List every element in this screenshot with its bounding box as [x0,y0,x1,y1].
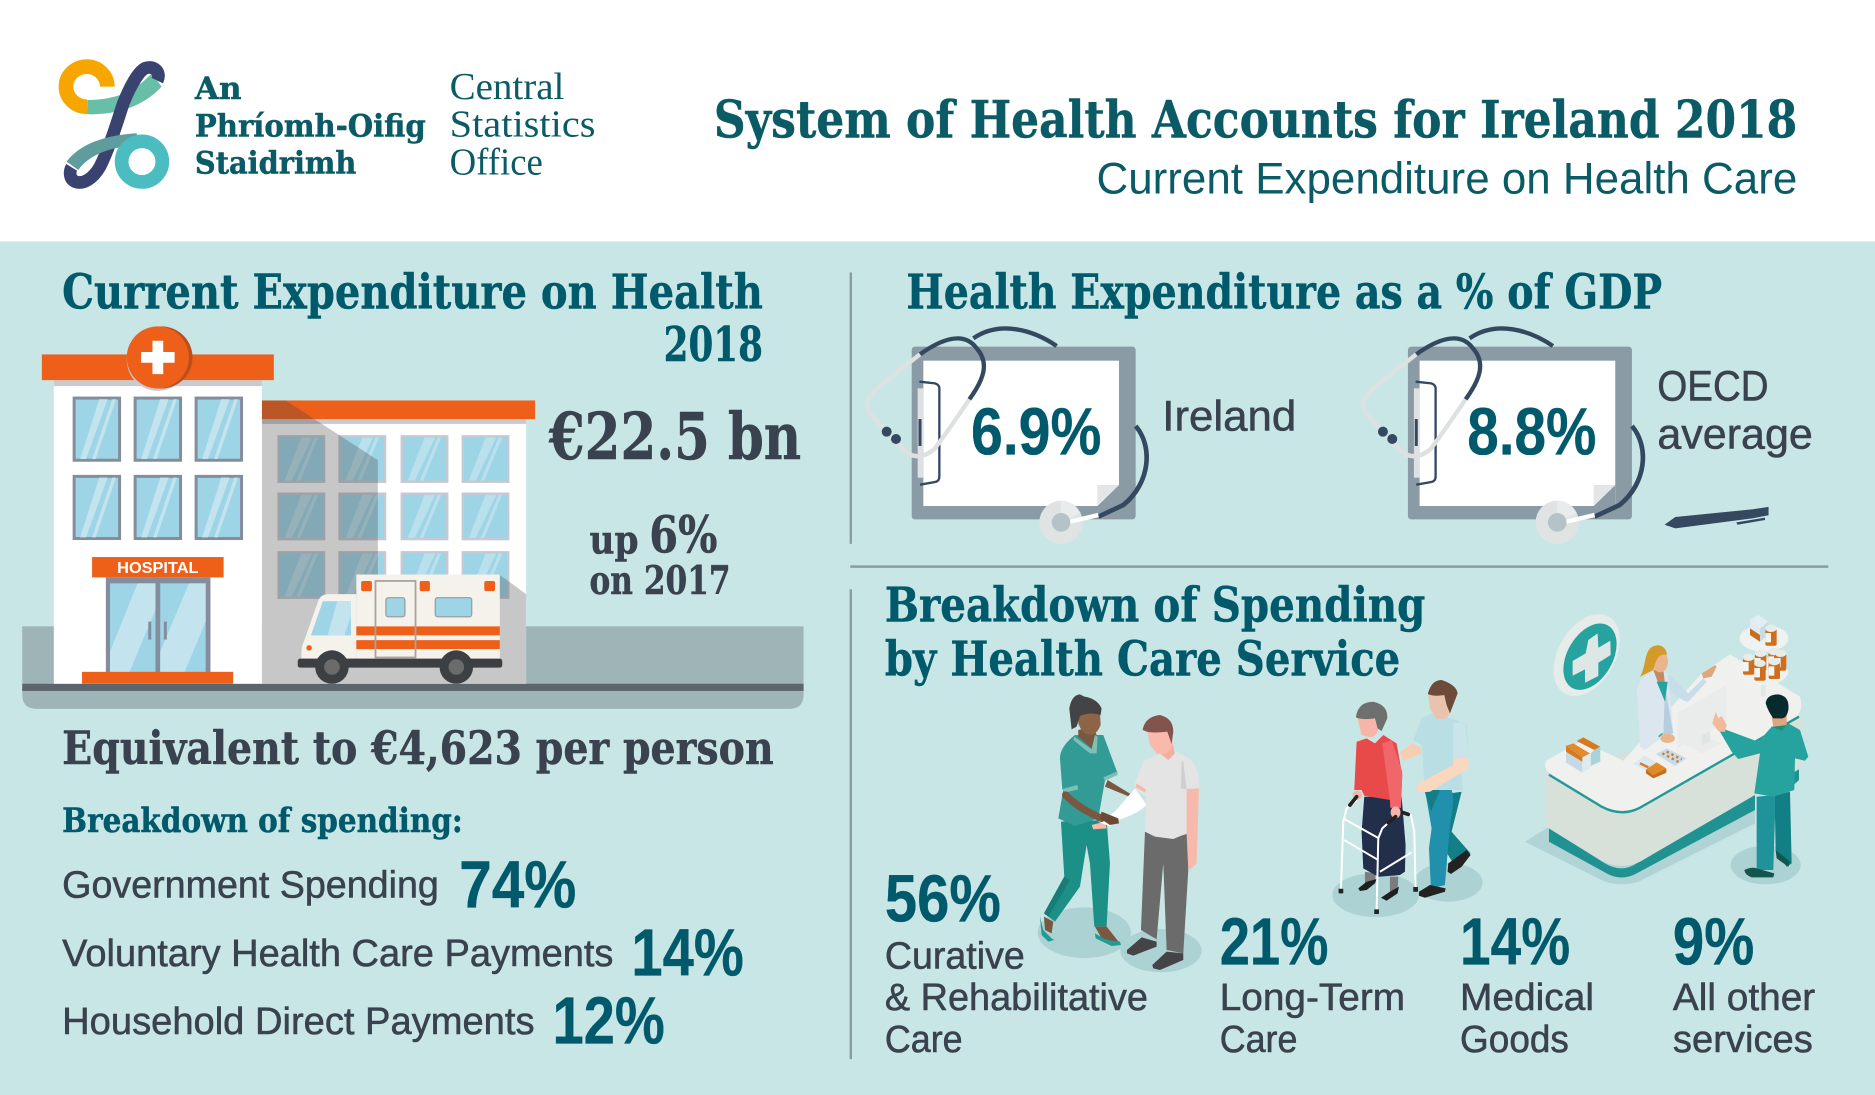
stat: other 9%: services [1673,1018,1813,1061]
stat: up 6% on 2017: 6% [649,505,717,564]
stat: medical goods 14%: Medical [1460,976,1594,1019]
logo Irish name [194,71,426,181]
clipboard: Ireland [867,328,1147,544]
stat: other 9%: 9% [1673,905,1754,980]
row: voluntary: 14% [631,915,744,990]
logo English name: Central [450,66,564,108]
stat: up 6% on 2017: on 2017 [590,558,731,604]
stat: medical goods 14%: Goods [1460,1018,1569,1061]
logo Irish name: Phríomh-Oifig [195,108,426,144]
label: Ireland: Ireland [1162,392,1296,440]
stat: 22.5 bn: €22.5 bn [548,399,801,475]
heading: current expenditure [62,264,763,373]
illustration: hospital and ambulance [22,326,804,709]
row: voluntary: Voluntary Health Care Payments [62,932,613,975]
logo English name: Statistics [450,103,596,145]
stat: curative 56%: Curative [885,934,1025,977]
stat: medical goods 14%: 14% [1460,905,1570,980]
row: household: 12% [552,984,665,1059]
heading: GDP: Health Expenditure as a % of GDP [906,264,1662,320]
heading: current expenditure: 2018 [664,317,763,373]
logo Irish name: Staidrimh [195,145,356,181]
label: OECD average: average [1657,410,1813,458]
logo icon [66,67,162,182]
stat: curative 56%: 56% [885,862,1001,937]
per person: Equivalent to €4,623 per person [62,721,774,775]
illustration: hospital and ambulance: HOSPITAL [117,559,199,577]
stat: medical goods 14% [1460,905,1594,1061]
row: voluntary [62,915,744,990]
stat: curative 56% [885,862,1148,1061]
stat: long-term 21%: Long-Term [1220,976,1405,1019]
logo English name [450,66,596,184]
row: government: Government Spending [62,864,439,907]
stat: other 9% [1673,905,1815,1061]
heading: breakdown by service: by Health Care Service [885,631,1400,687]
stat: long-term 21%: 21% [1220,905,1329,980]
heading: breakdown by service [885,578,1425,687]
clipboard: Ireland: 6.9% [971,394,1101,469]
label: OECD average [1657,362,1813,458]
stat: curative 56%: Care [885,1018,963,1061]
clipboard: OECD [1363,328,1643,544]
illustration: elderly patient with walker and carer [1332,680,1483,917]
heading: breakdown by service: Breakdown of Spending [885,578,1425,634]
stat: other 9%: All other [1673,976,1815,1019]
row: household [62,984,665,1059]
row: government: 74% [459,847,576,922]
logo Irish name: An [194,71,242,107]
illustration: nurse and patient [1038,694,1202,972]
icon: pen [1665,507,1769,528]
stat: long-term 21%: Care [1220,1018,1297,1061]
stat: up 6% on 2017: up [590,517,639,563]
breakdown subheading: Breakdown of spending: [62,801,463,840]
illustration: pharmacy counter [1525,602,1808,884]
row: household: Household Direct Payments [62,1000,535,1043]
label: OECD average: OECD [1657,362,1769,410]
main teal panel [0,241,1875,1095]
heading: current expenditure: Current Expenditure on Health [62,264,763,320]
stat: long-term 21% [1220,905,1405,1061]
clipboard: OECD: 8.8% [1467,394,1596,469]
logo English name: Office [450,142,543,184]
stat: curative 56%: & Rehabilitative [885,976,1148,1019]
row: government [62,847,576,922]
stat: up 6% on 2017 [590,505,731,604]
subtitle: Current Expenditure on Health Care [1097,155,1797,204]
